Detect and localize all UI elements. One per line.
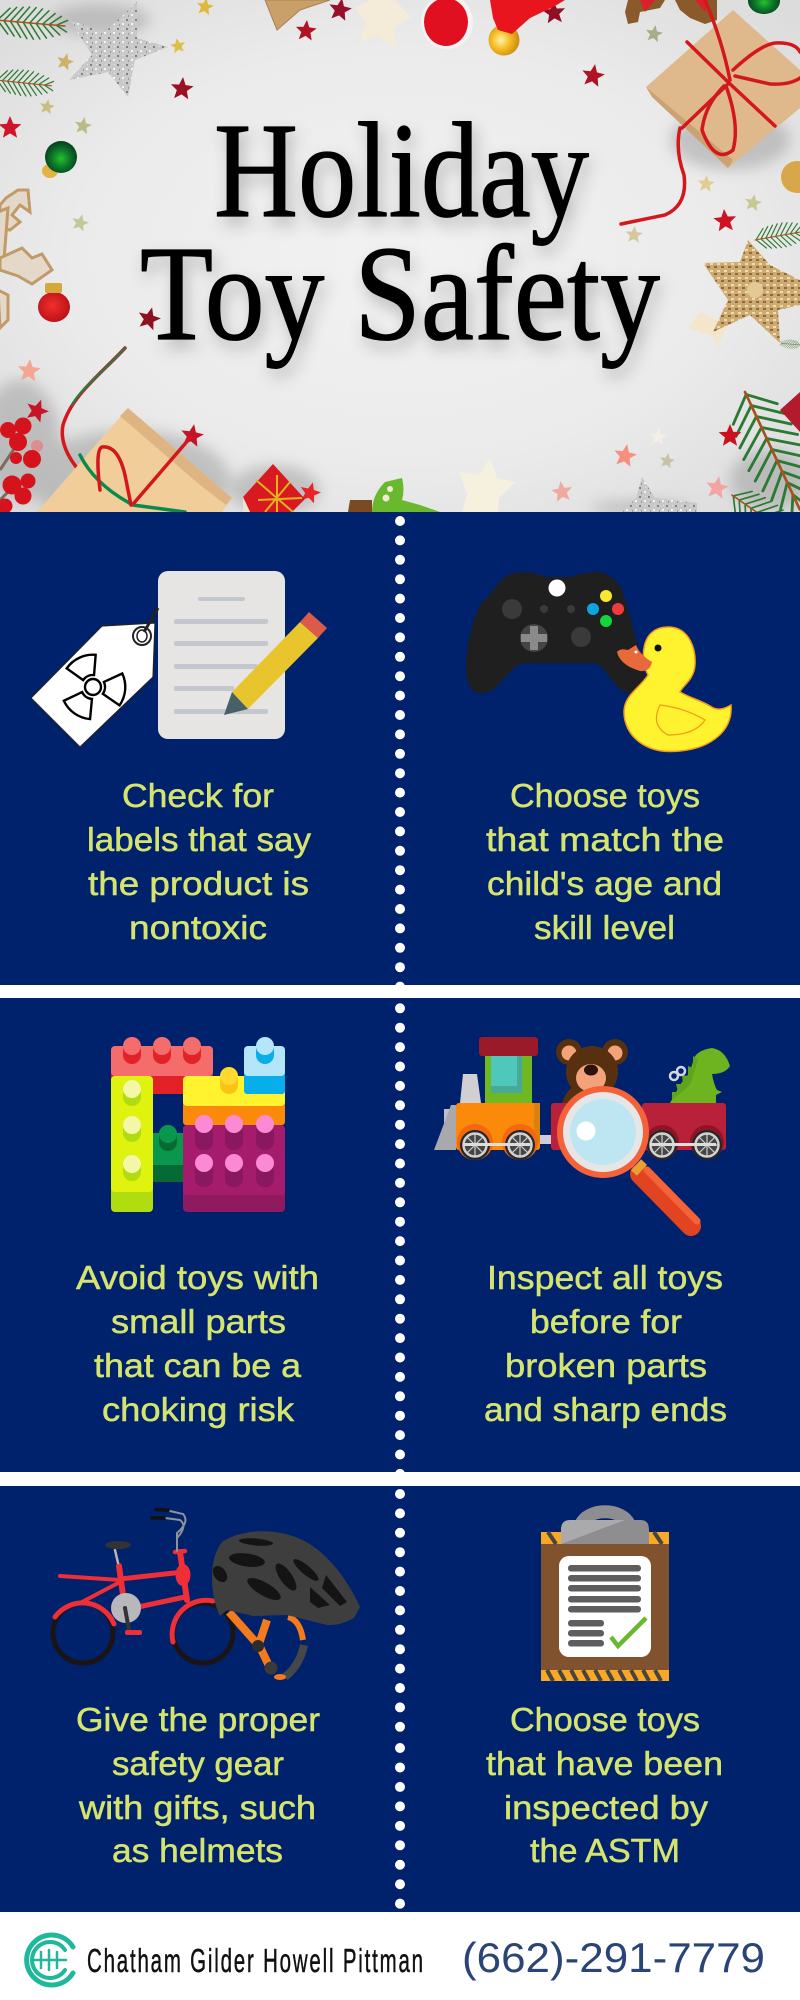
engine	[434, 1037, 552, 1160]
cream star, bottom	[459, 458, 515, 512]
icon: building blocks	[111, 1037, 285, 1212]
text: inspect toys: broken parts	[505, 1347, 707, 1384]
santa ornament, top	[421, 0, 565, 49]
text: small parts	[76, 1259, 319, 1428]
text: age and skill: that match the	[486, 821, 724, 858]
text: ASTM inspected: the ASTM	[530, 1832, 680, 1869]
little red gift	[243, 464, 305, 512]
panel: row 2	[0, 998, 800, 1476]
holly berries	[0, 418, 43, 514]
text: safety gear	[76, 1701, 320, 1869]
kraft gift box, bottom left	[37, 408, 232, 512]
panel: row 1	[0, 512, 800, 990]
cream wooden star, top	[355, 0, 411, 48]
icon: game controller	[466, 572, 645, 694]
silver glitter star, top left	[69, 2, 168, 97]
text: ASTM inspected: inspected by	[504, 1789, 709, 1826]
icon: toxic label tag and document with pencil	[31, 571, 327, 747]
text: nontoxic labels: the product is	[88, 865, 309, 902]
text: nontoxic labels: labels that say	[87, 821, 312, 858]
text: inspect toys: Inspect all toys	[487, 1259, 723, 1296]
ornaments	[38, 0, 800, 322]
title: Holiday	[214, 96, 589, 246]
text: nontoxic labels	[87, 777, 312, 946]
wooden snowflake, left	[0, 190, 52, 328]
gold foil star, right	[688, 240, 800, 348]
title: Toy Safety	[140, 219, 660, 369]
red gift, right edge	[780, 392, 800, 432]
icon: helmet	[210, 1531, 360, 1680]
text: ASTM inspected: Choose toys	[510, 1701, 700, 1738]
logo mark	[27, 1935, 73, 1985]
text: small parts: that can be a	[94, 1347, 302, 1384]
text: age and skill: child's age and	[487, 865, 722, 902]
text: ASTM inspected	[486, 1701, 723, 1869]
icon: clipboard checklist	[541, 1512, 669, 1681]
icon: toy train with bear and dinosaur under magnifying glass	[434, 1037, 730, 1226]
red twine	[62, 348, 135, 508]
text: age and skill	[486, 777, 724, 946]
text: safety gear: safety gear	[112, 1745, 284, 1782]
icon: rubber duck	[617, 627, 731, 752]
title	[140, 96, 660, 369]
text: ASTM inspected: that have been	[486, 1745, 723, 1782]
silver star, bottom	[622, 477, 697, 512]
pine branches	[0, 4, 800, 555]
hero: holiday flat lay background	[0, 0, 800, 555]
gold star, top	[265, 0, 330, 30]
carriages	[551, 1103, 726, 1160]
text: small parts: small parts	[111, 1303, 286, 1340]
text: age and skill: Choose toys	[510, 777, 700, 814]
icon: bicycle	[53, 1510, 233, 1663]
panel: row 3	[0, 1486, 800, 1912]
phone number: (662)-291-7779	[462, 1934, 765, 1981]
text: nontoxic labels: nontoxic	[129, 909, 267, 946]
teddy bear	[556, 1039, 628, 1103]
dinosaur	[670, 1048, 730, 1103]
gingerbread cookies, top right	[625, 0, 717, 24]
text: safety gear: with gifts, such	[78, 1789, 316, 1826]
text: age and skill: skill level	[534, 909, 675, 946]
soft object shadows	[0, 4, 800, 530]
kraft gift box, top right	[621, 0, 800, 224]
firm name: Chatham Gilder Howell Pittman	[87, 1942, 423, 1979]
text: nontoxic labels: Check for	[122, 777, 274, 814]
magnifying glass	[557, 1086, 697, 1226]
green ornament, bottom	[348, 478, 440, 512]
text: small parts: Avoid toys with	[76, 1259, 319, 1296]
text: inspect toys: before for	[530, 1303, 682, 1340]
text: inspect toys: and sharp ends	[484, 1391, 727, 1428]
text: safety gear: Give the proper	[76, 1701, 320, 1738]
text: small parts: choking risk	[102, 1391, 295, 1428]
text: inspect toys	[484, 1259, 727, 1428]
footer	[0, 1912, 800, 2000]
small stars	[0, 0, 763, 504]
text: safety gear: as helmets	[112, 1832, 283, 1869]
